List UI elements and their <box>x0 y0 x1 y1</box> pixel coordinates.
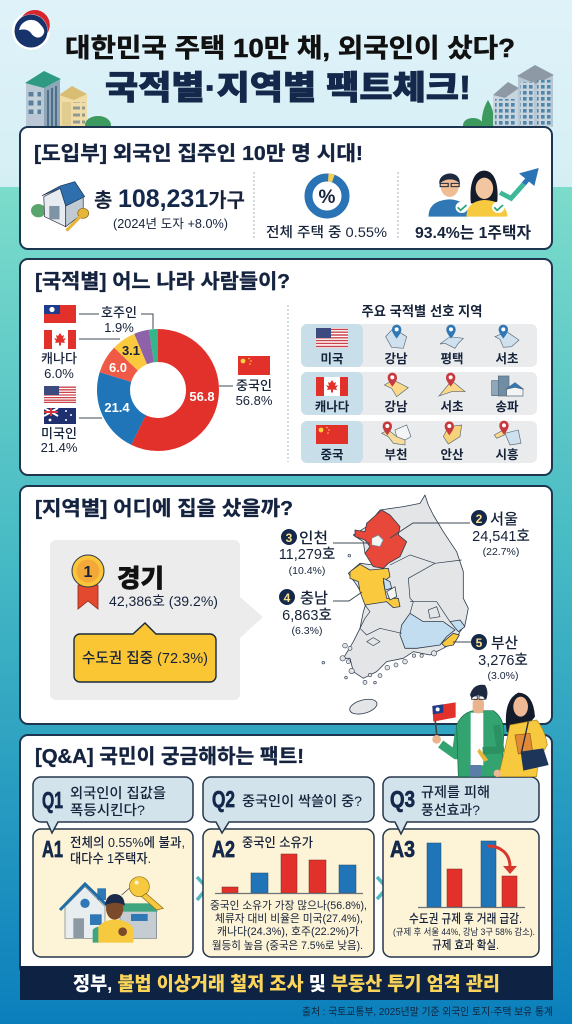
title <box>65 33 515 106</box>
label: Chungnam: 6,863호 <box>282 608 332 624</box>
label: Chungnam <box>279 589 332 637</box>
answer box A2: 중국인 소유가 <box>242 835 313 850</box>
icon: house with key <box>31 182 89 231</box>
label: Incheon: 인천 <box>299 530 328 547</box>
label: Incheon <box>279 529 335 577</box>
question bubble Q1: 외국인이 집값을 <box>70 785 166 801</box>
question bubble Q3: 규제를 피해 <box>421 784 490 800</box>
question bubble Q2: Q2 <box>212 786 235 812</box>
icon: house key and person <box>60 877 163 943</box>
flag: Canada table <box>316 377 348 396</box>
answer box A1: A1 <box>42 836 63 862</box>
flag: USA <box>44 386 76 403</box>
table labels: 강남 <box>384 352 408 366</box>
answer box A3: A3 <box>390 836 415 862</box>
text: 2024 change: (2024년 도자 +8.0%) <box>113 217 228 231</box>
question bubble Q3: Q3 <box>390 786 415 812</box>
chart: ownership bars <box>215 854 363 894</box>
table labels: 평택 <box>440 352 464 366</box>
panel: 지역별 <box>20 486 552 724</box>
icon: medal: 1 <box>84 564 93 581</box>
question bubble Q1: 폭등시킨다? <box>70 802 145 818</box>
table labels: 서초 <box>495 352 519 366</box>
heading: 국적별: [국적별] 어느 나라 사람들이? <box>35 270 290 293</box>
arrow: A1 to A2 <box>197 877 207 900</box>
title: 대한민국 주택 10만 채, 외국인이 샀다? <box>65 33 515 63</box>
map: South Korea <box>322 495 468 717</box>
text: A3 explanation: 수도권 규제 후 거래 급감. <box>409 912 522 926</box>
flag: Australia <box>44 408 76 424</box>
table labels: 부천 <box>384 448 408 462</box>
table labels: 시흥 <box>495 447 519 462</box>
chart: share ring: % <box>319 187 336 208</box>
question bubble Q1: Q1 <box>42 787 63 813</box>
question bubble Q3: 풍선효과? <box>421 802 480 818</box>
labels: nationalities: 1.9% <box>104 320 134 335</box>
donut labels: 3.1 <box>122 343 140 358</box>
icon: buildings left <box>25 71 111 134</box>
donut labels: 56.8 <box>189 389 215 404</box>
table title: 주요 국적별 선호 지역 <box>362 304 482 319</box>
label: Incheon: (10.4%) <box>289 565 325 577</box>
flag: China table <box>316 425 348 444</box>
chart: share ring <box>308 178 346 214</box>
callout: first place Gyeonggi <box>50 540 263 700</box>
label: Busan <box>471 634 528 682</box>
table labels: 송파 <box>495 400 519 414</box>
text: A3 explanation <box>393 912 535 952</box>
icons: region maps with pins <box>382 325 524 445</box>
labels: nationalities: 캐나다 <box>41 351 77 366</box>
banner: government measure: 정부, 불법 이상거래 철저 조사 및 부동산 투기 엄격 관리 <box>73 973 500 995</box>
stat: single home owners: 93.4%는 1주택자 <box>415 224 531 242</box>
arrow: decline <box>488 846 517 874</box>
table: preferred regions <box>301 304 537 463</box>
table labels: 중국 <box>320 448 344 462</box>
flag: Canada <box>44 330 76 349</box>
source note: 출처 : 국토교통부, 2025년말 기준 외국인 토지·주택 보유 통계 <box>302 1006 553 1018</box>
flag: USA table <box>316 328 348 348</box>
banner: government measure <box>20 966 553 1000</box>
label: Busan: 부산 <box>491 635 518 652</box>
labels: nationalities: 미국인 <box>41 426 77 441</box>
labels: nationalities <box>41 305 273 455</box>
callout: capital area: 수도권 집중 (72.3%) <box>82 650 208 667</box>
leader lines: map <box>333 523 473 642</box>
heading: Q&A: [Q&A] 국민이 궁금해하는 팩트! <box>35 745 304 768</box>
label: Chungnam: 4 <box>284 591 291 605</box>
label: Chungnam: 충남 <box>300 590 328 607</box>
islands <box>322 554 437 684</box>
text: A3 explanation: 규제 효과 확실. <box>432 938 499 952</box>
title: 국적별·지역별 팩트체크! <box>105 69 471 106</box>
stat: total households: 총 108,231가구 <box>94 185 245 213</box>
label: Busan: (3.0%) <box>488 670 518 682</box>
text: A2 explanation <box>210 899 367 952</box>
panel: 도입부 <box>20 127 552 249</box>
label: Seoul: 24,541호 <box>472 529 530 545</box>
arrow: A2 to A3 <box>377 877 387 899</box>
label: Chungnam: (6.3%) <box>292 625 322 637</box>
label: Incheon: 3 <box>286 531 293 545</box>
flag: Taiwan <box>44 305 76 323</box>
labels: nationalities: 호주인 <box>101 305 137 320</box>
question bubble Q3 <box>383 777 539 834</box>
icon: medal <box>72 555 104 609</box>
labels: nationalities: 21.4% <box>41 440 78 455</box>
text: Gyeonggi count: 42,386호 (39.2%) <box>109 593 218 609</box>
table labels: 안산 <box>440 448 464 462</box>
text: A2 explanation: 체류자 대비 비율은 미국(27.4%), <box>215 912 363 925</box>
labels: nationalities: 56.8% <box>236 393 273 408</box>
text: A2 explanation: 월등히 높음 (중국은 7.5%로 낮음). <box>212 938 363 952</box>
chart: transactions bars <box>418 841 525 908</box>
callout: capital area <box>74 623 216 682</box>
question bubble Q2: 중국인이 싹쓸이 중? <box>242 793 362 809</box>
table labels <box>315 352 519 462</box>
donut labels: 6.0 <box>109 360 127 375</box>
label: Seoul: 2 <box>476 512 483 526</box>
leader lines <box>79 314 233 418</box>
donut labels: 21.4 <box>104 400 130 415</box>
labels: nationalities: 6.0% <box>44 366 74 381</box>
label: Busan: 5 <box>476 636 483 650</box>
label: Incheon: 11,279호 <box>279 547 335 563</box>
panel: 국적별 <box>20 259 552 475</box>
table labels: 강남 <box>384 400 408 414</box>
table labels: 캐나다 <box>315 399 350 414</box>
text: A2 explanation: 캐나다(24.3%), 호주(22.2%)가 <box>217 925 359 938</box>
heading: 지역별: [지역별] 어디에 집을 샀을까? <box>35 497 293 520</box>
text: A2 explanation: 중국인 소유가 가장 많으나(56.8%), <box>210 899 367 912</box>
labels: nationalities: 중국인 <box>236 378 272 393</box>
question bubble Q1 <box>33 777 193 833</box>
answer box A3 <box>383 829 539 957</box>
table labels: 미국 <box>320 352 344 366</box>
label: Seoul <box>471 510 530 558</box>
icon: government taegeuk logo <box>12 10 50 50</box>
chart: nationality donut <box>114 346 202 434</box>
text: Gyeonggi: 경기 <box>117 565 164 593</box>
label: Seoul: (22.7%) <box>483 546 519 558</box>
donut labels <box>104 343 215 415</box>
question bubble Q2 <box>203 777 374 833</box>
label: Busan: 3,276호 <box>478 653 528 669</box>
illustration: couple with Taiwan flag <box>432 685 549 777</box>
icon: couple with rising arrow <box>429 168 539 217</box>
answer box A2 <box>203 829 374 957</box>
table labels: 서초 <box>440 400 464 414</box>
heading: 도입부: [도입부] 외국인 집주인 10만 명 시대! <box>34 142 363 165</box>
answer box A1 <box>33 829 193 957</box>
panel: Q&A <box>20 735 552 975</box>
answer box A2: A2 <box>212 836 235 862</box>
icon: buildings right <box>463 65 554 132</box>
label: Seoul: 서울 <box>490 511 518 528</box>
flag: China left <box>238 356 270 375</box>
stat: share of housing: 전체 주택 중 0.55% <box>266 224 387 240</box>
answer box A1: 대다수 1주택자. <box>70 851 151 866</box>
text: A3 explanation: (규제 후 서울 44%, 강남 3구 58% 감소). <box>393 926 535 937</box>
answer box A1: 전체의 0.55%에 불과, <box>70 835 185 850</box>
